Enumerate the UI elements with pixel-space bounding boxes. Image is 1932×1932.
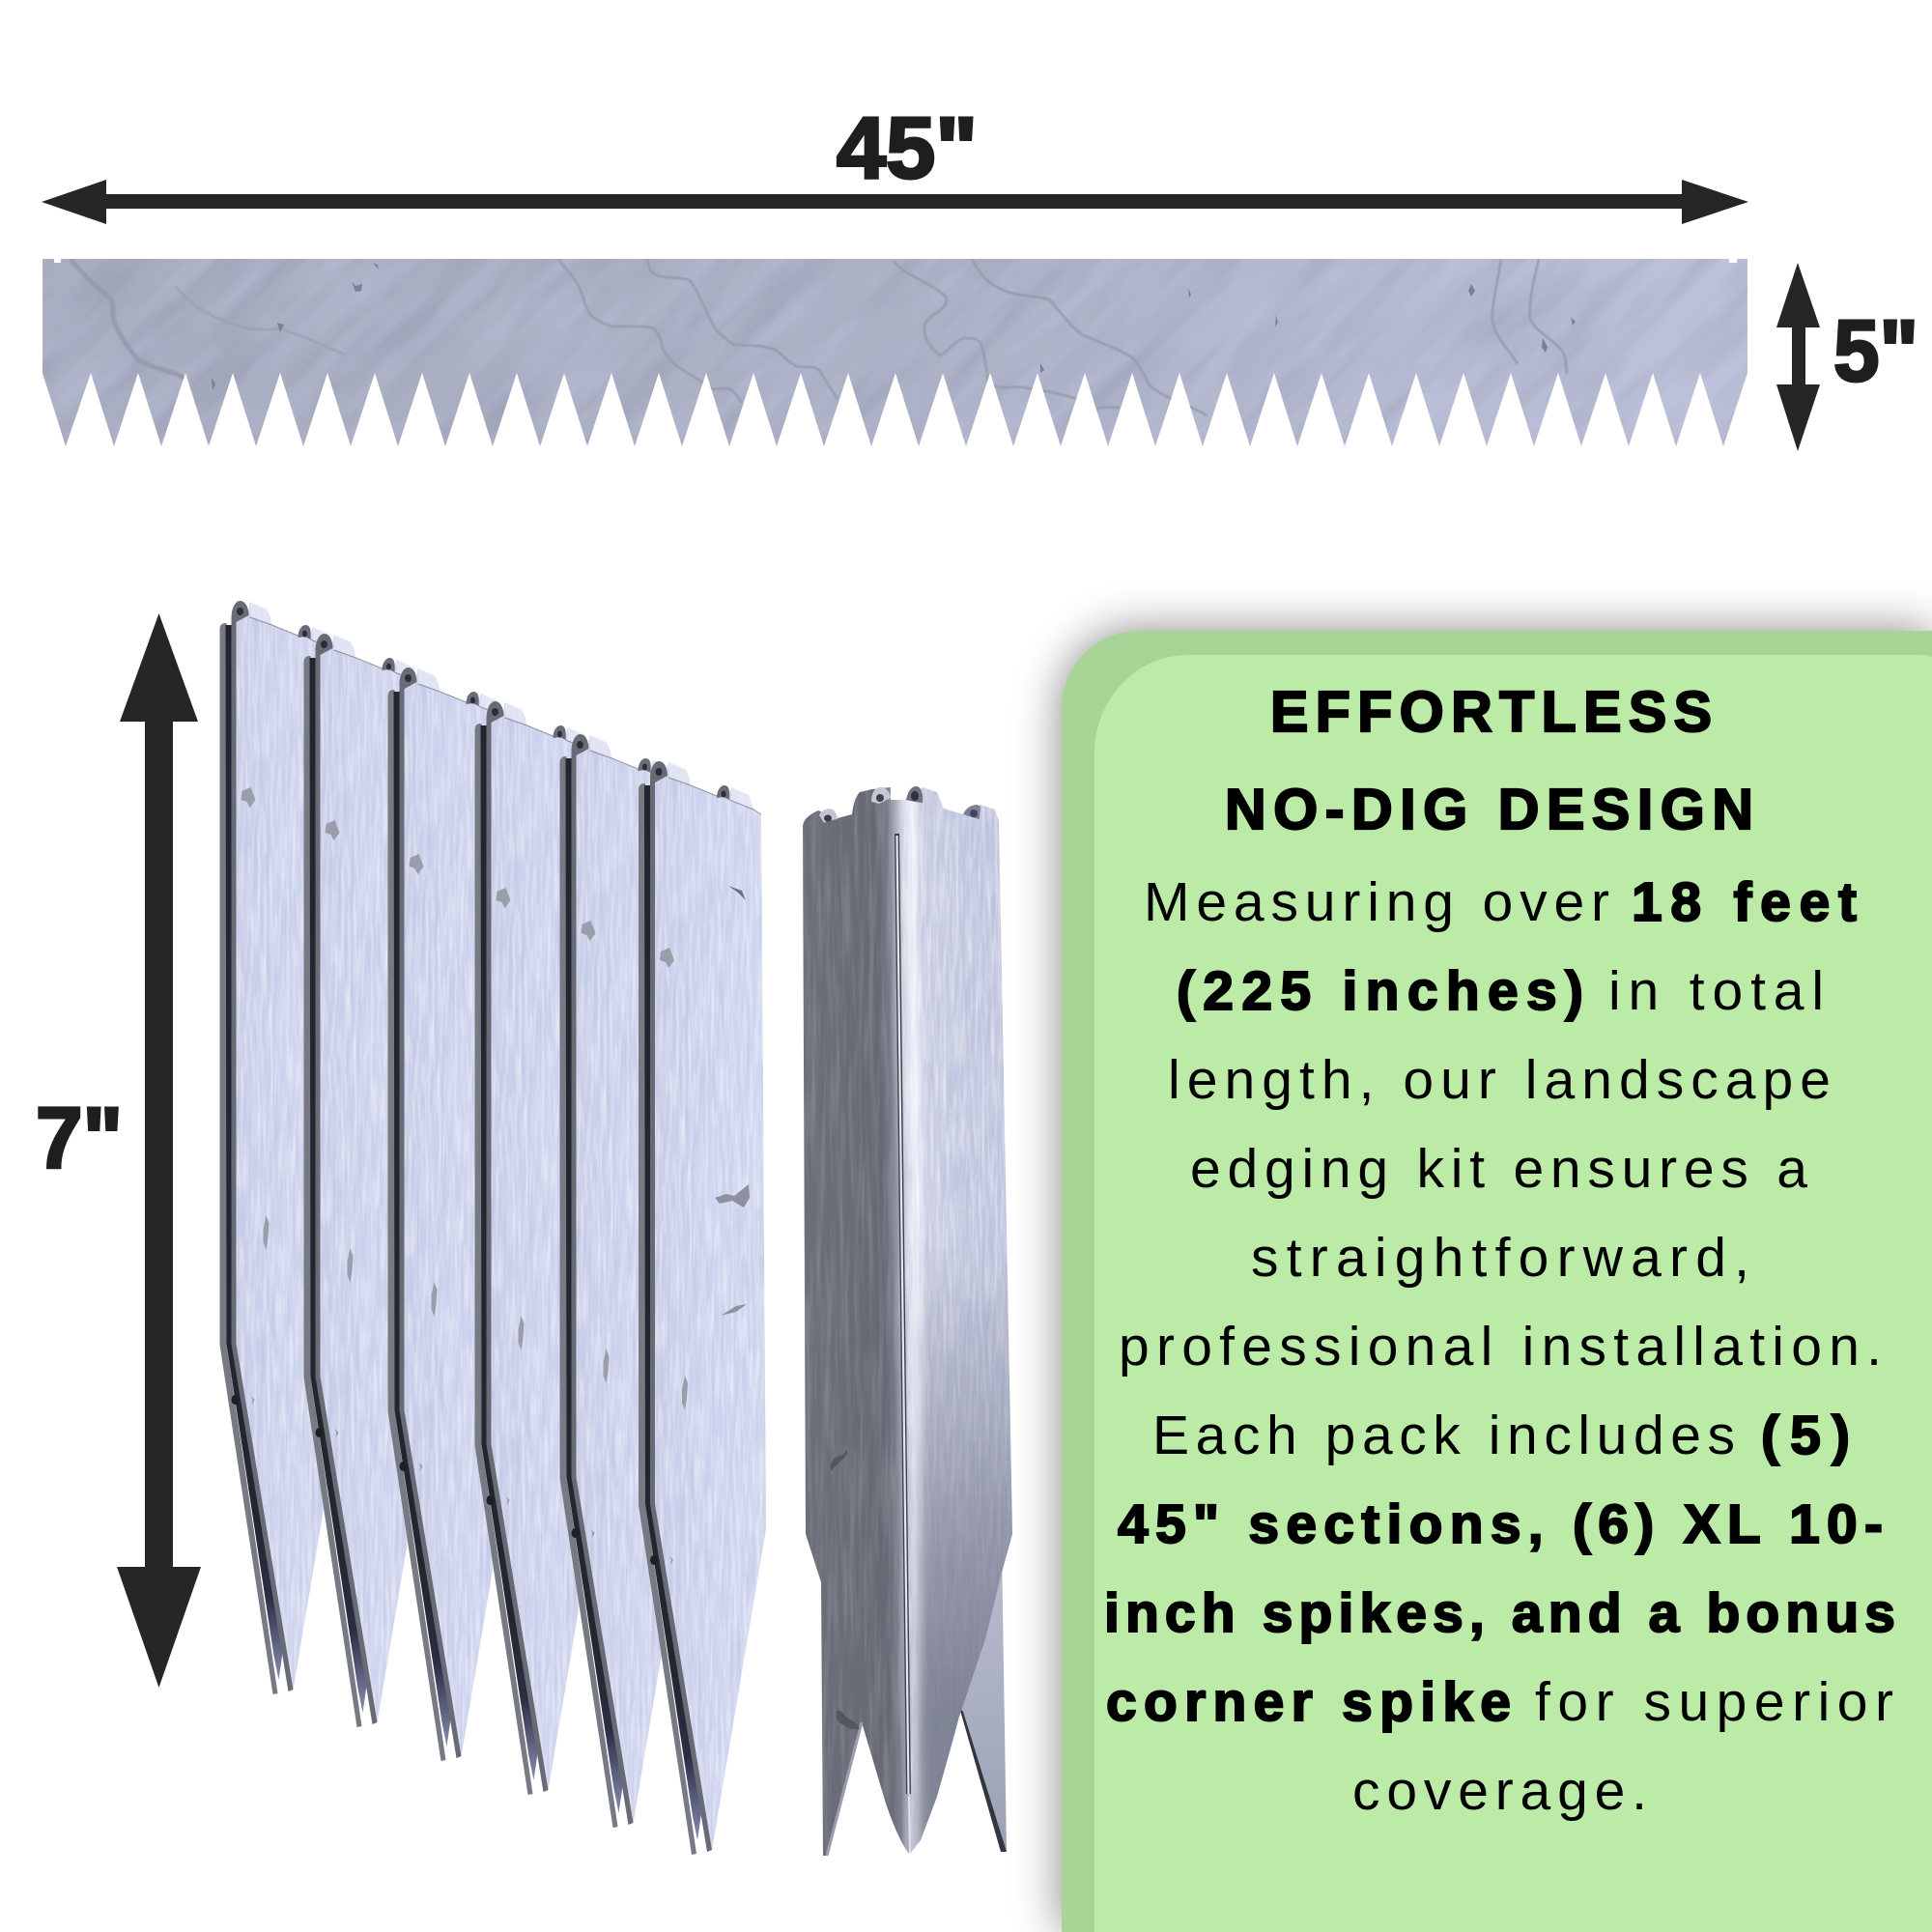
body text: kit description: length, our landscape	[1168, 1049, 1831, 1111]
label: 5 inch: 5"	[1833, 303, 1918, 400]
body text: kit description: corner spike	[1106, 1671, 1511, 1733]
group: six straight spikes	[220, 601, 766, 1855]
arrow: 45 inch width	[42, 180, 1748, 224]
body text: kit description: edging kit ensures a	[1190, 1138, 1807, 1200]
heading: effortless no-dig design: NO-DIG DESIGN	[1225, 778, 1753, 841]
body text: kit description: coverage.	[1352, 1760, 1647, 1822]
body text: kit description: Each pack includes	[1152, 1405, 1735, 1466]
body text: kit description: Measuring over	[1144, 871, 1609, 933]
title: 45 inch dimension label: 45"	[837, 100, 978, 197]
body text: kit description: (225 inches)	[1177, 960, 1583, 1022]
body text: kit description: inch spikes, and a bonus	[1104, 1582, 1895, 1644]
edging strip: serrated galvanized section	[43, 259, 1747, 446]
body text: kit description: 45" sections, (6) XL 10-	[1118, 1493, 1883, 1555]
corner spike	[803, 786, 1024, 1864]
body text: kit description: professional installation.	[1119, 1316, 1882, 1378]
panel: inner green text card	[1094, 655, 1932, 1932]
body text: kit description	[1104, 871, 1895, 1822]
body text: kit description: for superior	[1535, 1671, 1893, 1733]
arrow: 7 inch spike height	[117, 613, 201, 1688]
body text: kit description: straightforward,	[1251, 1227, 1749, 1289]
panel backing: green frame with shadow	[1062, 631, 1932, 1932]
heading: effortless no-dig design: EFFORTLESS	[1270, 680, 1712, 744]
body text: kit description: 18 feet	[1632, 871, 1857, 933]
arrow: 5 inch height	[1776, 263, 1820, 451]
heading: effortless no-dig design	[1225, 680, 1753, 841]
body text: kit description: (5)	[1761, 1405, 1850, 1466]
body text: kit description: in total	[1608, 960, 1824, 1022]
label: 7 inch: 7"	[36, 1091, 123, 1187]
